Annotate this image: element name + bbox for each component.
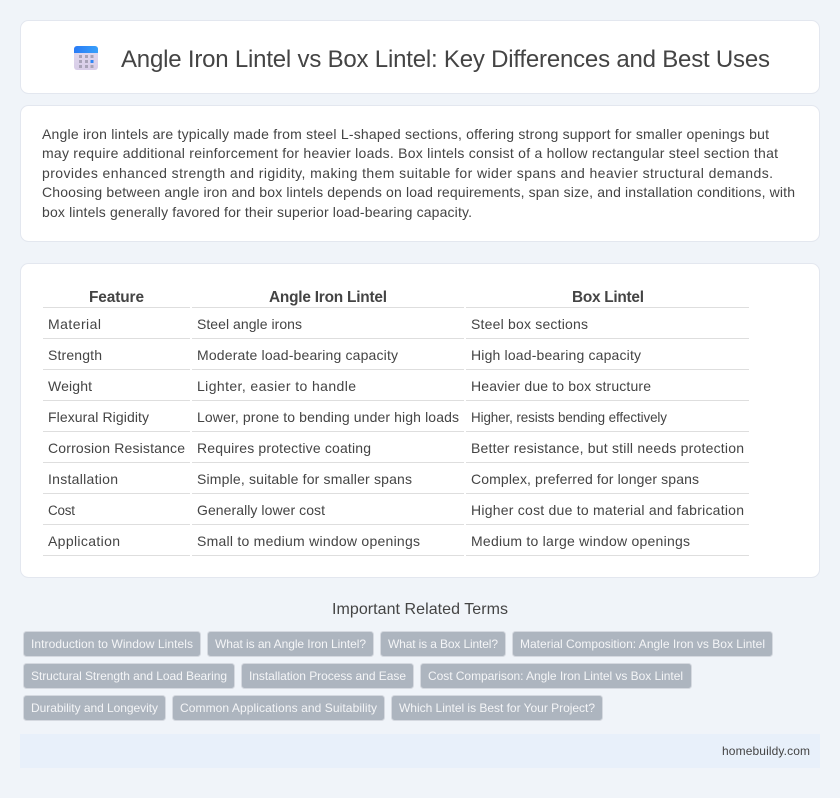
tag: Structural Strength and Load Bearing (31, 669, 227, 683)
row: material: Steel box sections (471, 316, 588, 332)
tag: Durability and Longevity (31, 701, 158, 715)
tag (420, 664, 692, 688)
text block: summary paragraph: box lintels generally favored for their superior load-bearing capacity. (42, 204, 472, 220)
tag: Common Applications and Suitability (180, 701, 377, 715)
row: application: Application (48, 533, 120, 549)
icon: calendar grid (74, 46, 98, 70)
tag (380, 632, 506, 656)
row: strength: Moderate load-bearing capacity (197, 347, 398, 363)
row: weight: Lighter, easier to handle (197, 378, 356, 394)
row: weight: Weight (48, 378, 92, 394)
row: corrosion resistance: Requires protective coating (197, 440, 371, 456)
row: material: Material (48, 316, 101, 332)
row: installation: Simple, suitable for smaller spans (197, 471, 412, 487)
row: corrosion resistance: Better resistance, but still needs protection (471, 440, 744, 456)
table header row: Feature (89, 289, 144, 306)
tag (172, 696, 384, 720)
row: application: Small to medium window openings (197, 533, 420, 549)
tag (242, 664, 414, 688)
text block: summary paragraph: Angle iron lintels are typically made from steel L-shaped sections, offering strong support for smaller openings but (42, 126, 769, 142)
heading: important related terms: Important Related Terms (332, 601, 508, 618)
tag: What is a Box Lintel? (388, 637, 498, 651)
tag: Which Lintel is Best for Your Project? (399, 701, 595, 715)
table header row: Box Lintel (572, 289, 644, 306)
row: strength: High load-bearing capacity (471, 347, 641, 363)
text block: summary paragraph: provides enhanced strength and rigidity, making them suitable for wider spans and heavier structural demands. (42, 165, 773, 181)
row: flexural rigidity: Higher, resists bending effectively (471, 410, 667, 425)
tag: What is an Angle Iron Lintel? (215, 637, 366, 651)
row: cost: Generally lower cost (197, 502, 325, 518)
table row lines (43, 307, 749, 556)
tag list: related terms (24, 632, 772, 720)
row: material: Steel angle irons (197, 316, 302, 332)
row: installation (48, 471, 699, 487)
tag (392, 696, 602, 720)
table header row: Angle Iron Lintel (269, 289, 387, 306)
text block: summary paragraph: Choosing between angle iron and box lintels depends on load requirements, span size, and installation conditions, with (42, 184, 795, 200)
header panel (20, 20, 820, 94)
row: cost: Higher cost due to material and fabrication (471, 502, 744, 518)
tag: Introduction to Window Lintels (31, 637, 193, 651)
row: material (48, 316, 588, 332)
row: corrosion resistance (48, 440, 744, 456)
table header row (89, 289, 644, 306)
tag (24, 632, 200, 656)
row: application: Medium to large window openings (471, 533, 690, 549)
row: corrosion resistance: Corrosion Resistance (48, 440, 185, 456)
tag (512, 632, 772, 656)
row: flexural rigidity: Flexural Rigidity (48, 409, 149, 425)
tag: Material Composition: Angle Iron vs Box Lintel (520, 637, 765, 651)
panel: comparison table (20, 264, 820, 578)
row: application (48, 533, 690, 549)
row: flexural rigidity (48, 409, 667, 425)
text block: summary paragraph: may require additional reinforcement for heavier loads. Box lintels consist of a hollow rectangular steel section that (42, 145, 778, 161)
row: weight: Heavier due to box structure (471, 378, 651, 394)
row: weight (48, 378, 651, 394)
footer (20, 734, 820, 768)
footer site name: homebuildy.com (722, 744, 810, 758)
tag: Installation Process and Ease (249, 669, 406, 683)
row: flexural rigidity: Lower, prone to bending under high loads (197, 409, 459, 425)
title: Angle Iron Lintel vs Box Lintel: Key Differences and Best Uses (121, 46, 770, 73)
text block: summary paragraph (42, 126, 795, 220)
row: installation: Complex, preferred for longer spans (471, 471, 699, 487)
tag: Cost Comparison: Angle Iron Lintel vs Box Lintel (428, 669, 683, 683)
row: strength: Strength (48, 347, 102, 363)
row: strength (48, 347, 641, 363)
tag (208, 632, 374, 656)
row: cost: Cost (48, 503, 75, 518)
panel: introduction (20, 106, 820, 242)
tag (24, 664, 234, 688)
row: installation: Installation (48, 471, 118, 487)
row: cost (48, 502, 744, 518)
tag (24, 696, 166, 720)
